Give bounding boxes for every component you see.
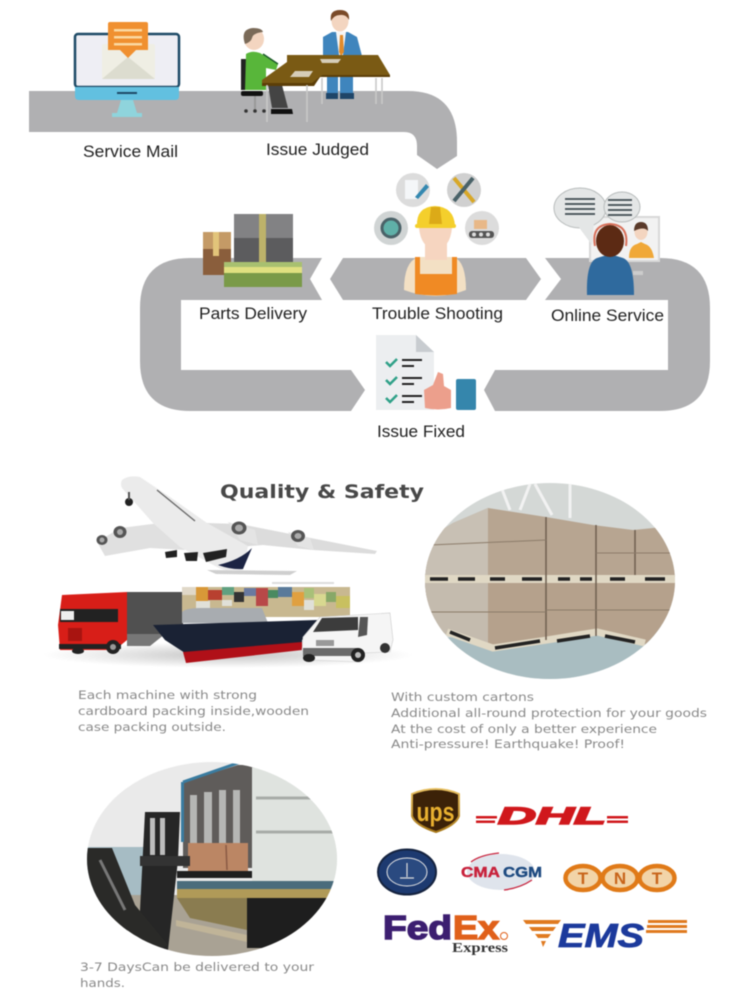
logo: DHL bbox=[476, 803, 628, 830]
caption: machine packing: cardboard packing inside,wooden bbox=[78, 704, 309, 718]
arrow: loop right section bbox=[484, 258, 710, 411]
logo: EMS: EMS bbox=[558, 917, 644, 954]
caption: machine packing: Each machine with strong bbox=[78, 688, 257, 702]
logo: UPS: ups bbox=[416, 797, 454, 827]
logo: TNT bbox=[566, 866, 674, 890]
logo: COSCO seal bbox=[378, 850, 436, 894]
logo: CMA CGM: CMA bbox=[461, 864, 500, 881]
icon: trouble shooting engineer with tool bubbles bbox=[374, 173, 499, 296]
logo: DHL: DHL bbox=[498, 803, 606, 830]
arrow: top band to trouble shooting bbox=[29, 91, 457, 169]
caption: custom cartons: Anti-pressure! Earthquake! Proof! bbox=[391, 737, 625, 751]
caption: machine packing: case packing outside. bbox=[78, 720, 226, 734]
logo: FedEx Express bbox=[383, 909, 509, 956]
ground shadow bbox=[43, 642, 413, 668]
logo: UPS bbox=[412, 789, 459, 832]
logo: FedEx Express: Express bbox=[452, 941, 509, 956]
heading: quality and safety: Quality & Safety bbox=[220, 481, 425, 503]
icon: white van bbox=[302, 613, 393, 662]
caption: custom cartons bbox=[391, 690, 707, 751]
logo: EMS bbox=[523, 917, 687, 954]
logo: TNT: N bbox=[614, 869, 626, 888]
label: online service: Online Service bbox=[551, 306, 664, 325]
label: issue fixed: Issue Fixed bbox=[377, 422, 465, 441]
caption: delivery time bbox=[80, 960, 314, 990]
image: transport vehicles and plane bbox=[43, 476, 413, 668]
caption: custom cartons: Additional all-round protection for your goods bbox=[391, 706, 707, 720]
photo: forklift loading container bbox=[85, 760, 340, 960]
icon: parts delivery boxes bbox=[203, 214, 302, 287]
panel: courier logos bbox=[378, 789, 687, 956]
panel: service process flow bbox=[29, 10, 710, 441]
icon: container ship bbox=[153, 583, 350, 663]
logo: TNT: T bbox=[652, 869, 663, 888]
label: service mail: Service Mail bbox=[83, 142, 178, 161]
logo: CMA CGM: CGM bbox=[503, 864, 542, 881]
caption: machine packing bbox=[78, 688, 309, 734]
logo: FedEx Express: Ex bbox=[453, 909, 500, 946]
caption: custom cartons: With custom cartons bbox=[391, 690, 534, 704]
label: issue judged: Issue Judged bbox=[266, 140, 369, 159]
icon: airplane bbox=[96, 476, 377, 575]
icon: issue judged meeting at desk bbox=[241, 10, 390, 122]
icon: service mail monitor bbox=[75, 22, 179, 117]
caption: delivery time: hands. bbox=[80, 976, 125, 990]
caption: custom cartons: At the cost of only a better experience bbox=[391, 722, 657, 736]
label: trouble shooting: Trouble Shooting bbox=[372, 304, 503, 323]
icon: online service agent with speech bubbles bbox=[554, 188, 659, 295]
photo: warehouse stacked cartons bbox=[424, 482, 676, 680]
logo: FedEx Express: Fed bbox=[383, 909, 452, 946]
logo: TNT: T bbox=[578, 869, 589, 888]
caption: delivery time: 3-7 DaysCan be delivered to your bbox=[80, 960, 314, 974]
logo: CMA CGM bbox=[461, 853, 542, 890]
icon: issue fixed checklist and thumb bbox=[376, 335, 476, 410]
icon: red truck bbox=[58, 592, 183, 654]
arrow: middle hexagon bbox=[330, 258, 541, 300]
arrow: loop left section bbox=[140, 258, 365, 411]
label: parts delivery: Parts Delivery bbox=[199, 304, 307, 323]
